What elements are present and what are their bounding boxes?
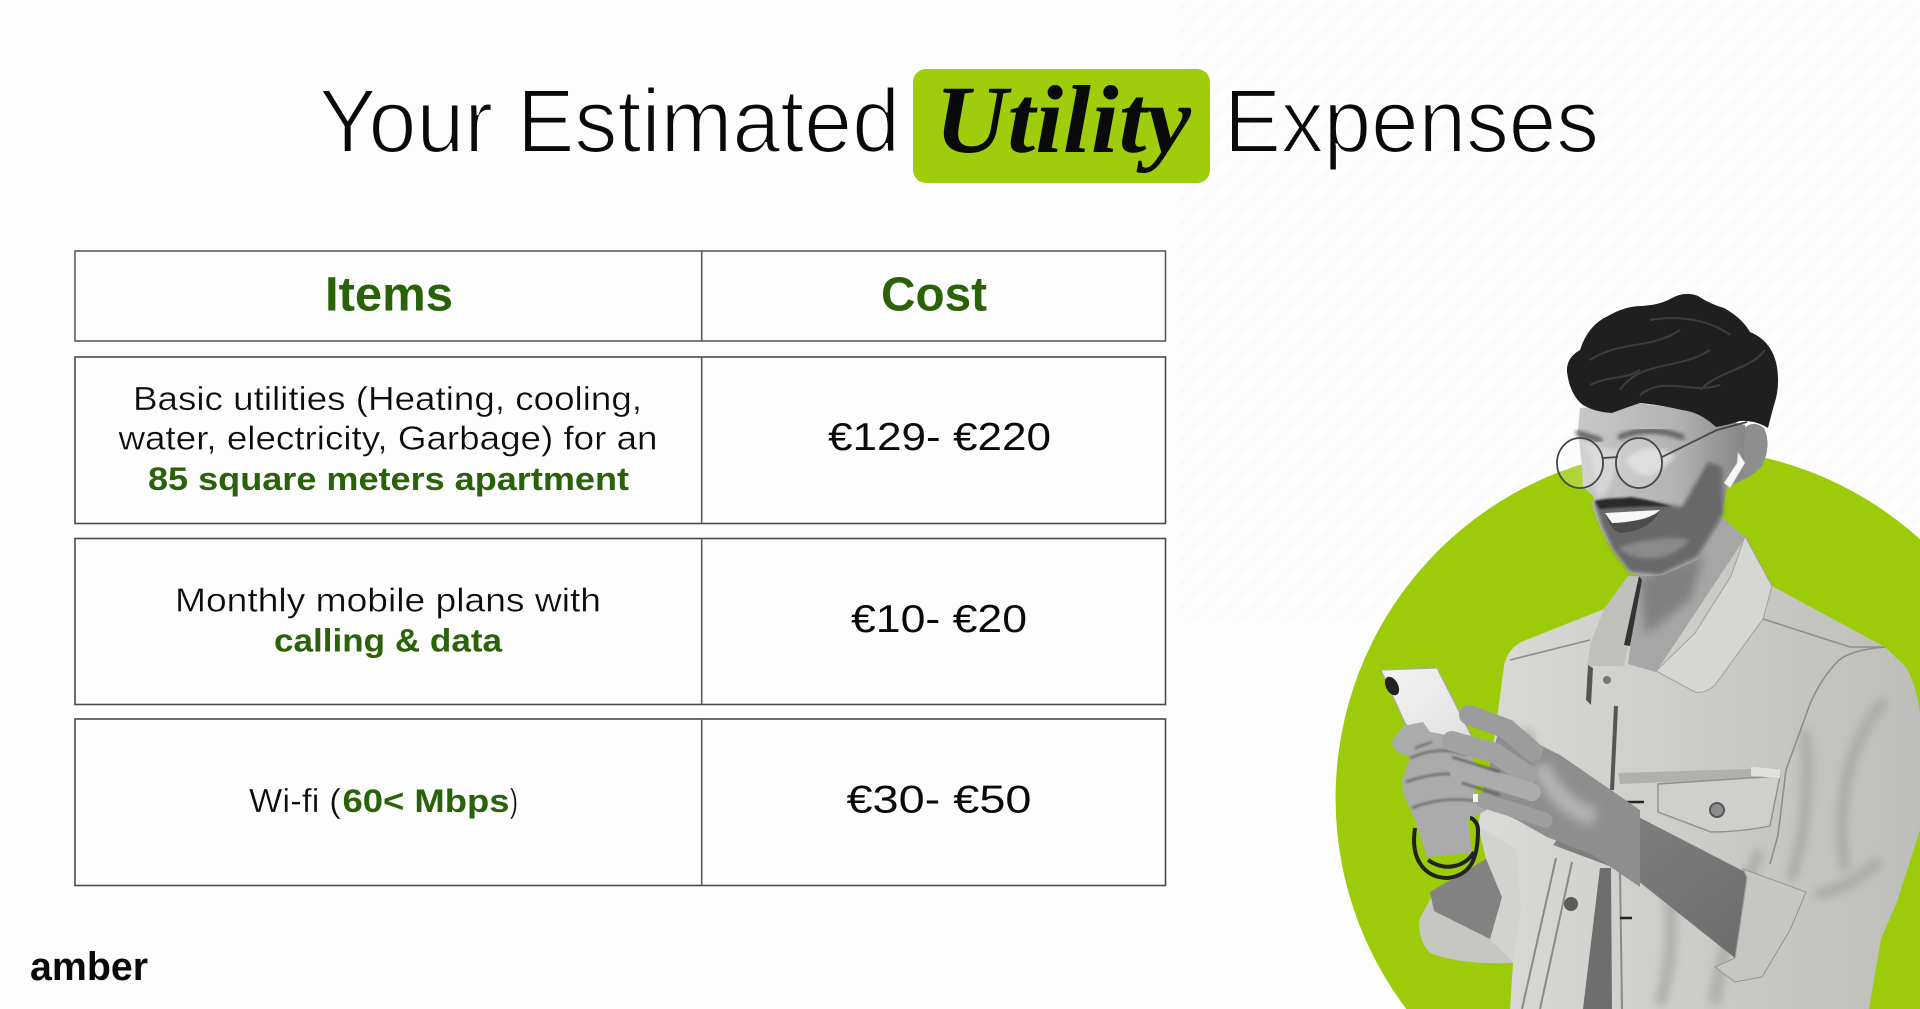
logo: amber: amber <box>30 945 148 989</box>
left forearm <box>1430 859 1502 939</box>
table header row: Items <box>325 268 453 322</box>
table <box>75 251 1166 886</box>
table row: mobile plans: calling & data <box>274 622 502 658</box>
table row: basic utilities: Basic utilities (Heating, cooling, <box>133 380 642 417</box>
title: last word: Expenses <box>1224 72 1599 172</box>
table row: wi-fi: 60< Mbps <box>342 783 510 819</box>
table row: basic utilities: water, electricity, Garbage) for an <box>117 420 657 456</box>
earbud <box>1724 452 1745 488</box>
title: highlighted word: Utility <box>935 66 1191 173</box>
table header row <box>75 251 1166 341</box>
neck <box>1628 515 1745 672</box>
table row: wi-fi: ) <box>510 782 518 819</box>
table row: wi-fi: Wi-fi ( <box>249 782 341 819</box>
title highlight box <box>913 69 1210 183</box>
table header row: Cost <box>881 268 987 322</box>
ear <box>1732 424 1768 484</box>
rolled sleeve cuff <box>1715 869 1806 982</box>
undershirt <box>1583 868 1612 1009</box>
beard <box>1594 462 1723 575</box>
title: lead words: Your Estimated <box>319 72 900 172</box>
table row: wi-fi <box>75 719 1166 886</box>
eyebrows <box>1578 431 1682 440</box>
photo: man with phone <box>1381 294 1920 1009</box>
table row: basic utilities: 85 square meters apartment <box>148 461 629 497</box>
table row: mobile plans <box>75 538 1166 704</box>
jacket seams <box>1510 619 1885 864</box>
face <box>1578 403 1745 576</box>
jacket <box>1419 536 1920 1009</box>
table row: mobile plans: €10- €20 <box>851 598 1027 641</box>
collar <box>1586 536 1772 790</box>
jacket button <box>1564 897 1578 911</box>
holding hand <box>1391 722 1487 857</box>
table row: wi-fi: €30- €50 <box>846 778 1032 822</box>
chest pocket <box>1618 767 1780 918</box>
green circle <box>1336 449 1920 1009</box>
table row: mobile plans: Monthly mobile plans with <box>175 582 601 618</box>
smile <box>1605 510 1660 533</box>
hair <box>1567 294 1778 428</box>
table row: basic utilities <box>75 357 1166 524</box>
bracelets <box>1414 818 1478 878</box>
forearm <box>1553 818 1746 958</box>
phone <box>1380 667 1472 736</box>
title <box>319 66 1599 183</box>
table row: basic utilities: €129- €220 <box>828 416 1051 459</box>
placket <box>1522 858 1622 1009</box>
glasses <box>1557 422 1747 488</box>
phone hand <box>1452 715 1640 887</box>
